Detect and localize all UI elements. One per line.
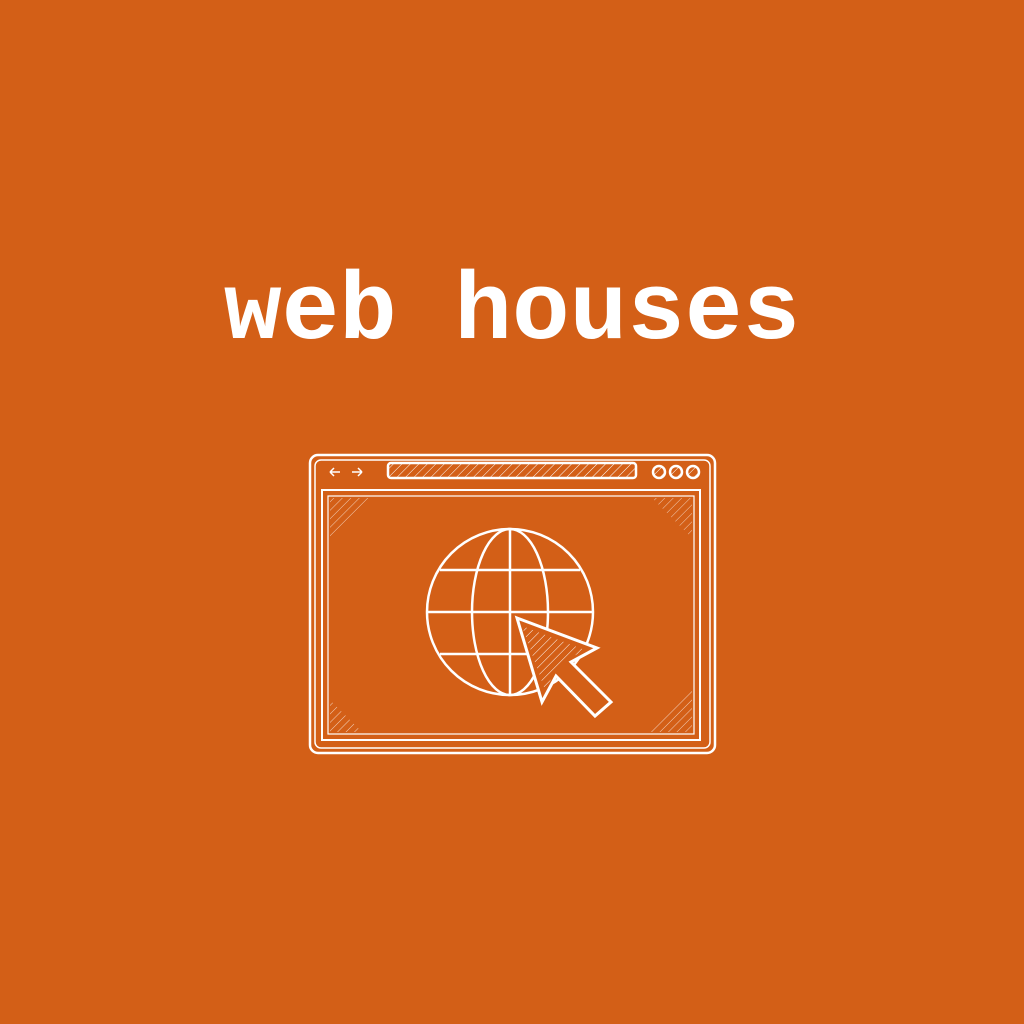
icon: cursor arrow: [517, 618, 611, 716]
title: web houses: [224, 258, 800, 367]
browser frame: [310, 455, 715, 753]
icon: globe: [427, 529, 593, 695]
